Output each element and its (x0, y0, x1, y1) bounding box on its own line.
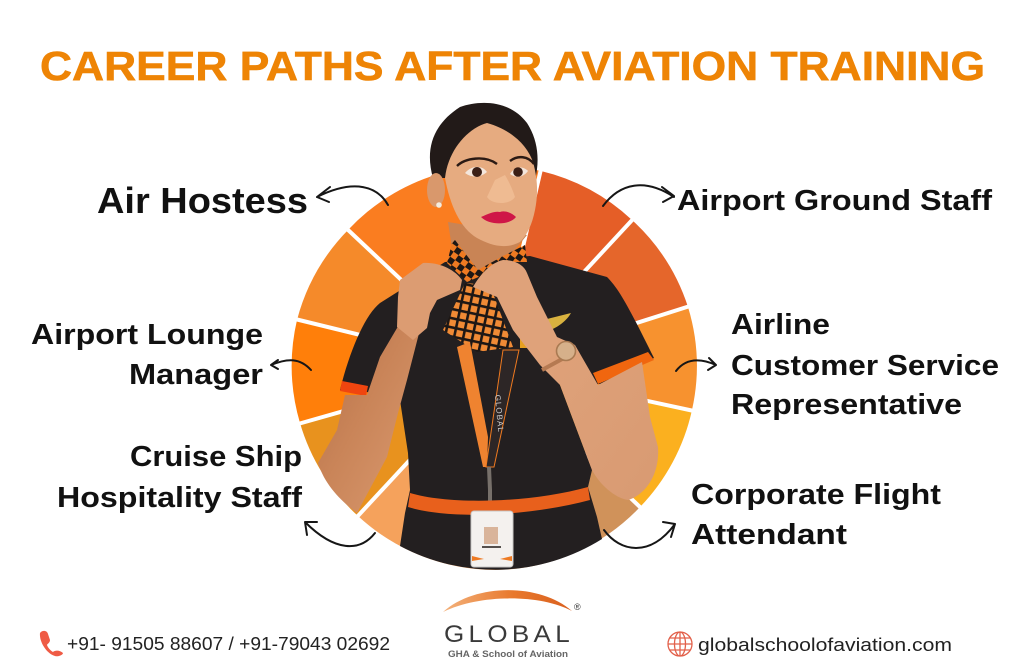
wheel segment: left middle (292, 320, 495, 423)
iris left (472, 167, 482, 177)
label: airport lounge manager (31, 319, 263, 391)
eye left (465, 167, 487, 177)
segmented wheel (292, 166, 697, 570)
icon: globe (668, 632, 692, 656)
logo: global (443, 590, 581, 659)
label: corporate flight attendant (691, 479, 941, 551)
arrow: corporate flight attendant (604, 522, 675, 548)
label: cruise ship hospitality staff (57, 441, 302, 514)
logo tagline: GHA & School of Aviation (448, 649, 568, 659)
earring (436, 202, 442, 208)
belt (408, 487, 590, 515)
curved arrows (271, 185, 716, 548)
label: airport lounge manager: Airport Lounge (31, 319, 263, 351)
wheel segment: right lower (495, 368, 692, 507)
ear (427, 173, 445, 207)
lanyard text: GLOBAL (493, 394, 505, 433)
left sleeve cuff (340, 381, 368, 396)
wheel segment: left lower (300, 368, 495, 516)
scarf neck band (447, 240, 527, 282)
label: cruise ship hospitality staff: Cruise Ship (130, 441, 302, 473)
wheel spokes (295, 169, 694, 518)
lanyard black strap (486, 350, 519, 467)
gold wing pin (547, 313, 571, 330)
right hand (473, 260, 560, 365)
badge name (482, 546, 501, 548)
label: airline customer service representative: Customer Service (731, 350, 999, 382)
badge footer accent (472, 556, 512, 561)
label: airline customer service representative (731, 309, 999, 421)
arrow: airport ground staff (603, 185, 674, 206)
lanyard orange strap (457, 342, 488, 467)
wheel segment: top right (495, 171, 632, 368)
eye right (510, 168, 528, 177)
lanyard clip (489, 467, 490, 510)
arrow: customer service (676, 358, 716, 371)
right arm (540, 337, 658, 500)
watch strap (542, 352, 575, 370)
icon: phone (40, 631, 63, 656)
label: airport ground staff: Airport Ground Staff (677, 185, 992, 217)
label: airport lounge manager: Manager (129, 359, 263, 391)
watch face (556, 342, 576, 360)
badge photo (484, 527, 498, 544)
face (445, 123, 537, 246)
website: globalschoolofaviation.com (698, 635, 952, 655)
arrow: cruise ship (305, 522, 375, 546)
gold badge pin (520, 338, 544, 348)
person: flight attendant (318, 103, 658, 570)
id badge (471, 511, 513, 567)
nose (487, 175, 515, 203)
label: airline customer service representative: Airline (731, 309, 830, 341)
logo arc (443, 590, 572, 612)
label: cruise ship hospitality staff: Hospitality Staff (57, 482, 302, 514)
wheel segment: bottom right (495, 368, 640, 570)
shirt (340, 256, 654, 570)
wheel segment: right middle (495, 307, 697, 410)
logo wordmark: GLOBAL (444, 621, 574, 648)
label: air hostess: Air Hostess (97, 180, 308, 221)
wheel segment: left upper (297, 230, 495, 368)
arrow: airport lounge manager (271, 360, 311, 370)
scarf bow (443, 283, 513, 352)
wrist watch (542, 342, 576, 370)
left hand (397, 263, 462, 340)
lips (481, 211, 516, 223)
right sleeve cuff (593, 352, 654, 384)
hair (430, 103, 538, 180)
label: airline customer service representative: Representative (731, 389, 962, 421)
eyebrows (457, 157, 534, 166)
registered mark: ® (574, 602, 581, 612)
wheel segment: upper left (348, 166, 541, 368)
arrow: air hostess (317, 186, 388, 205)
wheel segment: bottom left (358, 368, 495, 570)
title: CAREER PATHS AFTER AVIATION TRAINING (40, 43, 985, 89)
phone numbers: +91- 91505 88607 / +91-79043 02692 (67, 634, 390, 654)
label: corporate flight attendant: Corporate Flight (691, 479, 941, 511)
left arm (318, 310, 425, 513)
iris right (513, 167, 523, 177)
label: corporate flight attendant: Attendant (691, 519, 847, 551)
wheel segment: right upper (495, 220, 688, 368)
neck (448, 222, 527, 275)
badge card (471, 511, 513, 567)
